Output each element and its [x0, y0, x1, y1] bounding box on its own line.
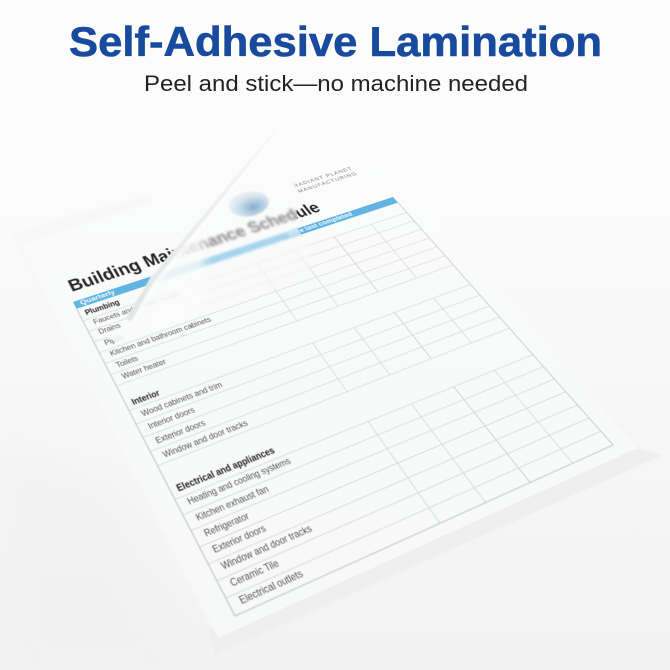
band label: Quarterly: Quarterly [79, 289, 117, 306]
row: Drains [97, 322, 122, 336]
table grid lines [76, 202, 614, 617]
row: Toilets [115, 355, 140, 370]
film fold highlight [126, 130, 281, 323]
title: Self-Adhesive Lamination [69, 18, 602, 65]
row: Kitchen and bathroom cabinets [109, 316, 213, 358]
company name: MANUFACTURING [296, 171, 359, 194]
subtitle: Peel and stick—no machine needed [144, 71, 528, 96]
title [69, 18, 602, 96]
section: interior [130, 381, 250, 460]
peeled laminate film haze [107, 183, 310, 345]
row: Faucets and shower heads [92, 290, 182, 326]
section: electrical and appliances [175, 446, 314, 607]
row: Refrigerator [202, 511, 252, 539]
row: Water heater [120, 358, 168, 381]
logo shell [227, 188, 271, 220]
row: Interior doors [146, 406, 197, 431]
company name: RADIANT PLANET [292, 166, 354, 189]
document: building maintenance schedule [65, 166, 614, 617]
row: Heating and cooling systems [186, 456, 293, 507]
row: Exterior doors [154, 419, 207, 446]
heading: Building Maintenance Schedule: Building Maintenance Schedule [65, 199, 324, 296]
row: Wood cabinets and trim [140, 381, 224, 419]
row: Window and door tracks [161, 419, 250, 460]
row: Window and door tracks [219, 523, 314, 572]
row: Ceramic Tile [228, 558, 281, 590]
row: Pipes [103, 334, 125, 347]
section heading: Interior [130, 389, 162, 407]
section: plumbing [84, 290, 213, 381]
band label: date last completed: Date last completed [287, 211, 354, 237]
blue header band [73, 197, 398, 309]
section heading: Electrical and appliances [175, 446, 277, 494]
section heading: Plumbing [84, 299, 121, 317]
row: Exterior doors [211, 523, 268, 556]
row: Electrical outlets [237, 568, 306, 607]
row: Kitchen exhaust fan [194, 484, 271, 524]
